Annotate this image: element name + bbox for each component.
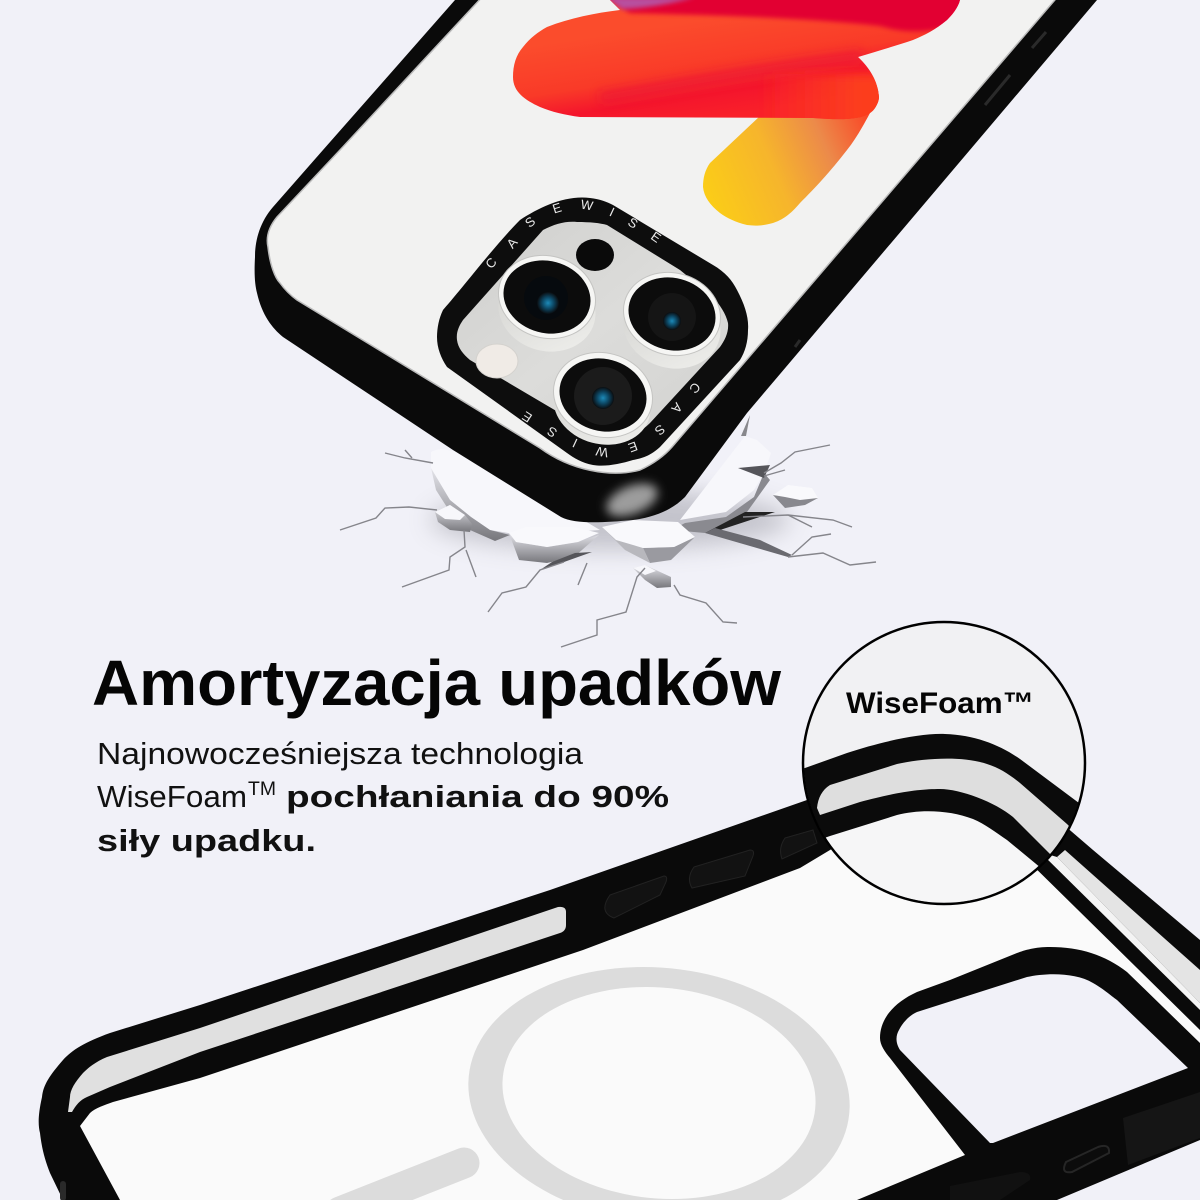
casewise ring text bottom: A xyxy=(668,400,686,416)
lower edge long button xyxy=(950,1172,1030,1200)
lens 2 xyxy=(614,262,730,379)
side buttons xyxy=(795,32,1046,347)
white phone back xyxy=(267,0,1060,473)
casewise ring text bottom: S xyxy=(544,423,560,441)
foam band xyxy=(817,758,1069,854)
top phone case on impact xyxy=(255,0,1097,523)
magsafe ring xyxy=(453,967,865,1200)
casewise ring text top: C xyxy=(482,255,500,271)
left slot xyxy=(60,1181,66,1200)
rock lower xyxy=(633,565,671,588)
casewise ring text top: S xyxy=(522,213,538,231)
crack wedge under rocks xyxy=(540,552,592,570)
small rock right xyxy=(773,485,818,508)
clear panel xyxy=(826,811,1038,903)
casewise ring text top: S xyxy=(625,214,641,232)
heading: Amortyzacja upadków xyxy=(92,647,781,719)
casewise ring text bottom: I xyxy=(570,435,580,451)
casewise ring text bottom: E xyxy=(626,438,640,456)
casewise ring text bottom: E xyxy=(519,408,535,426)
casewise ring text bottom xyxy=(519,379,704,460)
side buttons xyxy=(605,830,817,918)
camera hole xyxy=(576,239,614,271)
casewise ring text top xyxy=(482,197,664,271)
lens label: WiseFoam™ xyxy=(846,687,1034,720)
casewise ring text top: E xyxy=(551,199,564,216)
small rock left xyxy=(435,505,472,532)
black case frame xyxy=(39,770,1200,1200)
casewise ring text top: E xyxy=(648,228,664,246)
bottom transparent case xyxy=(39,770,1200,1200)
lens 1 xyxy=(489,245,605,362)
casewise ring text bottom: W xyxy=(594,443,609,460)
casewise ring text bottom: S xyxy=(652,421,668,439)
lens 3 xyxy=(544,341,662,455)
lens fill xyxy=(803,622,1085,904)
lens outline xyxy=(803,622,1085,904)
casewise ring text bottom: C xyxy=(686,379,704,397)
illustration: cracked ground xyxy=(340,415,876,647)
rock center right xyxy=(602,520,695,563)
flash xyxy=(476,344,518,378)
casewise ring text top: W xyxy=(580,197,595,214)
black bumper xyxy=(255,0,1097,522)
right broken plate xyxy=(672,415,775,533)
outer rail xyxy=(804,734,1078,903)
white line beside inner rail xyxy=(1040,852,1200,1010)
magnifier circle: WiseFoam xyxy=(802,620,1086,906)
gradient ribbon xyxy=(505,0,975,226)
body text: siły upadku. xyxy=(97,823,316,858)
body text: Najnowocześniejsza technologia xyxy=(97,736,584,771)
rock center left xyxy=(509,527,599,563)
casewise ring text top: I xyxy=(607,204,617,220)
lower edge sheen xyxy=(1123,1092,1200,1165)
clear back panel xyxy=(80,830,1200,1200)
crack lines xyxy=(340,445,876,647)
body text xyxy=(97,736,669,858)
body text: pochłaniania do 90% xyxy=(286,779,669,814)
camera plate xyxy=(457,222,728,438)
left broken plate xyxy=(431,449,600,541)
bumper highlight xyxy=(602,477,662,523)
right wedge crack xyxy=(705,528,792,557)
body text: WiseFoam xyxy=(97,779,247,814)
camera window xyxy=(896,974,1188,1143)
magsafe pill xyxy=(340,1163,464,1200)
foam strip right xyxy=(1057,850,1200,1003)
body text: TM xyxy=(248,779,276,800)
lower edge port xyxy=(1064,1146,1109,1172)
casewise ring text top: A xyxy=(503,235,521,251)
magsafe ring centre xyxy=(490,987,828,1199)
magnified rail xyxy=(804,734,1078,903)
camera island ring xyxy=(437,198,748,466)
foam strip left xyxy=(68,907,566,1112)
impact shadow xyxy=(430,490,790,550)
